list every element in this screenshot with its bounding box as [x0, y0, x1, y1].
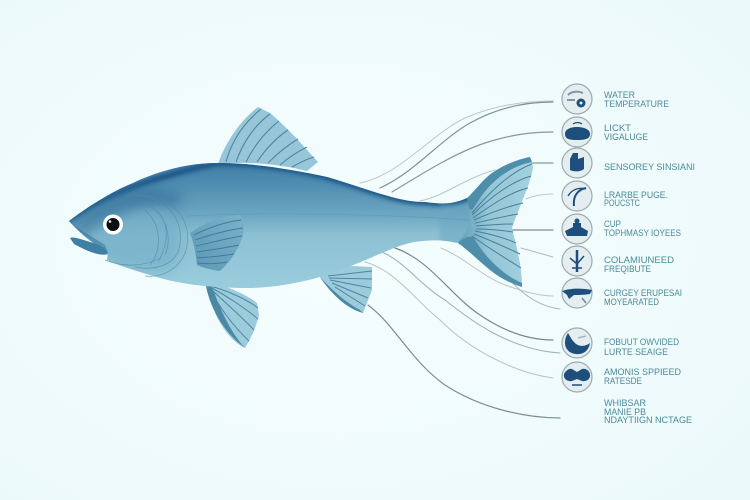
label: reed: FREQIBUTE — [604, 264, 651, 274]
eye — [103, 214, 123, 234]
label: speed: AMONIS SPPIEED — [604, 367, 681, 377]
label: reed: COLAMIUNEED — [604, 255, 675, 265]
label: food: LURTE SEAIGE — [604, 347, 668, 357]
label: speed: RATESDE — [604, 376, 642, 386]
label: current — [604, 288, 682, 307]
label: speed — [604, 367, 681, 386]
label: whisker: MANIE PB — [604, 407, 646, 417]
label: current: MOYEARATED — [604, 297, 659, 307]
gill lines — [105, 195, 188, 276]
icon: reed — [562, 246, 592, 276]
pectoral fin — [190, 215, 244, 271]
label: large pulse: POUCSTC — [604, 198, 640, 208]
fish anatomy infographic — [69, 83, 694, 423]
label: cup — [604, 219, 681, 238]
ventral fin — [205, 280, 259, 348]
label: sensory: SENSOREY SINSIANI — [604, 162, 695, 172]
label: water temperature: TEMPERATURE — [604, 99, 669, 109]
fish illustration — [60, 107, 533, 348]
label: whisker: NDAYTIIGN NCTAGE — [604, 415, 692, 425]
label: food — [604, 337, 679, 357]
upper jaw shadow — [69, 221, 108, 253]
icon: crescent — [562, 328, 592, 358]
icon: speed — [562, 362, 592, 392]
label: water temperature: WATER — [604, 90, 635, 100]
icon: light — [562, 117, 592, 147]
label: light: VIGALUGE — [604, 132, 648, 142]
icon column — [562, 84, 592, 392]
tail fin — [458, 157, 533, 287]
icon: water temperature — [562, 84, 592, 114]
icon: large pulse — [562, 181, 592, 211]
label: food: FOBUUT OWVIDED — [604, 337, 679, 347]
labels — [604, 90, 695, 425]
label: cup: CUP — [604, 219, 621, 229]
anal fin — [320, 266, 372, 313]
label: reed — [604, 255, 675, 274]
lower jaw — [70, 238, 108, 255]
label: light — [604, 123, 648, 142]
label: large pulse: LRARBE PUGE. — [604, 190, 668, 200]
label: large pulse — [604, 190, 668, 208]
lateral line — [187, 214, 470, 220]
dorsal fin — [218, 107, 318, 171]
label: cup: TOPHMASY IOYEES — [604, 228, 681, 238]
icon: sensory — [562, 148, 592, 178]
icon: fish silhouette — [562, 278, 592, 308]
label: water temperature — [604, 90, 669, 109]
label: light: LICKT — [604, 123, 632, 133]
icon: cup — [562, 214, 592, 244]
fish body — [69, 163, 470, 288]
label: current: CURGEY ERUPESAI — [604, 288, 682, 298]
label: whisker — [604, 398, 692, 425]
label: whisker: WHIBSAR — [604, 398, 646, 408]
connector lines — [360, 101, 560, 418]
